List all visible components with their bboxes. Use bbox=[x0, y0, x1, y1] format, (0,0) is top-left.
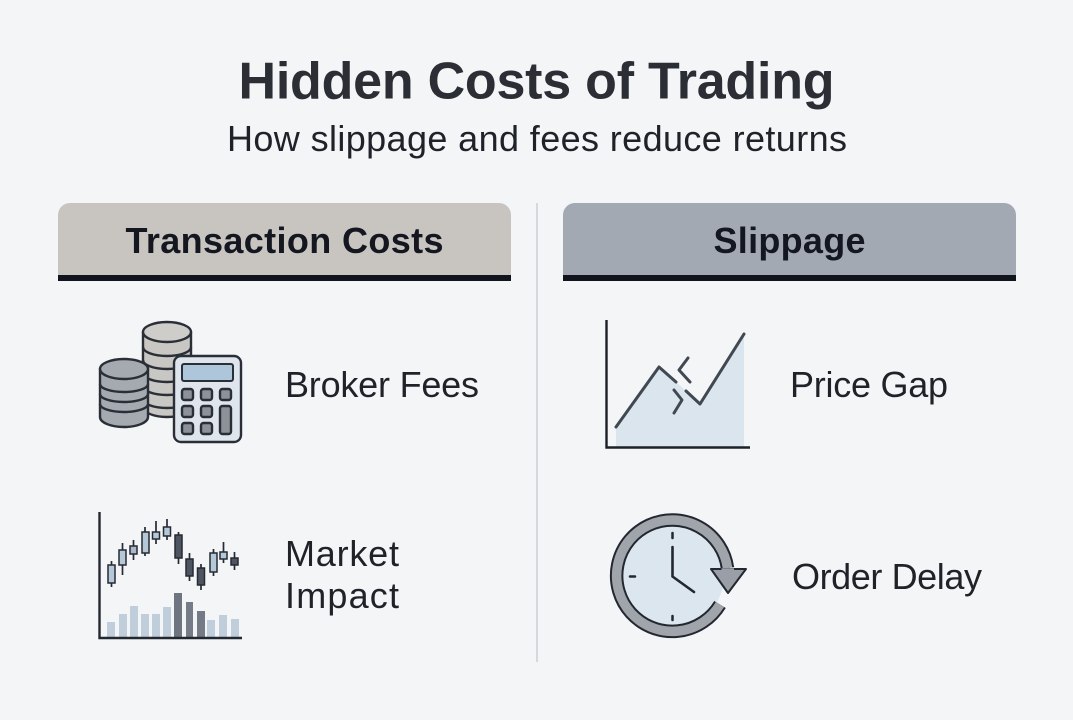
panel header: Slippage: Slippage bbox=[714, 220, 866, 261]
panel header: Slippage bbox=[563, 203, 1016, 281]
label: Broker Fees: Broker Fees bbox=[285, 364, 479, 405]
icon: price gap chart bbox=[606, 320, 750, 448]
label: Market Impact: Market bbox=[285, 533, 399, 574]
label: Price Gap: Price Gap bbox=[790, 364, 948, 405]
center divider bbox=[536, 203, 538, 662]
title: Hidden Costs of Trading bbox=[238, 52, 834, 110]
label: Market Impact: Impact bbox=[285, 575, 399, 616]
icon: candlestick and volume chart bbox=[100, 512, 242, 638]
panel header: Transaction Costs: Transaction Costs bbox=[126, 220, 444, 261]
icon: coins and calculator bbox=[100, 322, 241, 442]
icon: clock with delay arrow bbox=[617, 520, 746, 631]
label: Order Delay: Order Delay bbox=[792, 556, 982, 597]
subtitle: How slippage and fees reduce returns bbox=[227, 118, 847, 159]
panel header: Transaction Costs bbox=[58, 203, 511, 281]
